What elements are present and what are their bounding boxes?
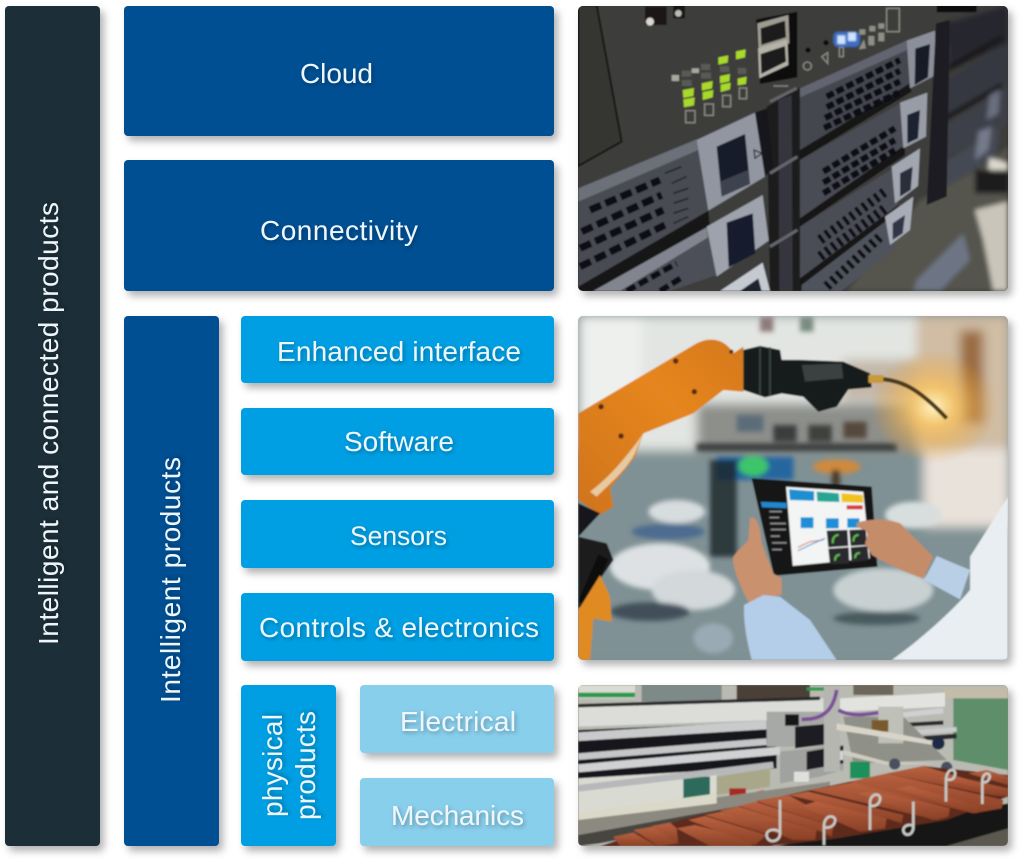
panel: connectivity bbox=[124, 160, 554, 291]
label: controls and electronics: Controls & electronics bbox=[259, 612, 539, 643]
panel: physical products bbox=[241, 685, 336, 846]
control units bbox=[767, 712, 835, 747]
photo: server rack bbox=[578, 5, 1008, 291]
label: mechanics: Mechanics bbox=[391, 800, 524, 831]
right server rows bbox=[800, 41, 910, 150]
usb port bbox=[756, 12, 797, 84]
right handles bbox=[907, 31, 936, 88]
label: connectivity: Connectivity bbox=[260, 215, 418, 246]
panel: software bbox=[241, 408, 554, 475]
tablet bbox=[752, 478, 877, 576]
dark conveyor band bbox=[578, 722, 777, 783]
photo: robot arm and tablet bbox=[578, 315, 1010, 663]
wire hooks bbox=[767, 770, 990, 845]
wooden bars bbox=[613, 766, 1008, 846]
panel: mechanics bbox=[360, 778, 554, 846]
sleeves and coat bbox=[744, 595, 837, 660]
left server row 2 bbox=[578, 211, 710, 291]
panel: controls and electronics bbox=[241, 593, 554, 661]
wrist bbox=[743, 346, 872, 412]
panel: intelligent and connected products bbox=[5, 6, 100, 846]
robot arm bbox=[578, 340, 743, 515]
label: software: Software bbox=[344, 426, 454, 457]
white machines bbox=[648, 500, 705, 523]
panel: sensors bbox=[241, 500, 554, 568]
label: enhanced interface: Enhanced interface bbox=[277, 336, 521, 367]
status leds bbox=[683, 49, 747, 107]
label: intelligent products: Intelligent products bbox=[155, 457, 186, 703]
panel: intelligent products bbox=[124, 316, 219, 846]
blue leds bbox=[833, 32, 860, 47]
label: physical: physical bbox=[257, 714, 288, 817]
label: electrical: Electrical bbox=[400, 706, 516, 737]
panel: cloud bbox=[124, 6, 554, 136]
panel: enhanced interface bbox=[241, 316, 554, 383]
label: cloud: Cloud bbox=[300, 58, 373, 89]
label: intelligent and connected products: Intelligent and connected products bbox=[33, 202, 64, 645]
photo: xylophone assembly machine bbox=[578, 685, 1008, 846]
silver rails bbox=[578, 711, 957, 788]
hands bbox=[733, 518, 782, 605]
top switches bbox=[645, 7, 667, 25]
left server row 1 bbox=[578, 139, 708, 287]
label: sensors: Sensors bbox=[350, 521, 447, 551]
lower frame bbox=[578, 782, 830, 835]
label: products: products bbox=[290, 711, 321, 820]
panel: electrical bbox=[360, 685, 554, 753]
